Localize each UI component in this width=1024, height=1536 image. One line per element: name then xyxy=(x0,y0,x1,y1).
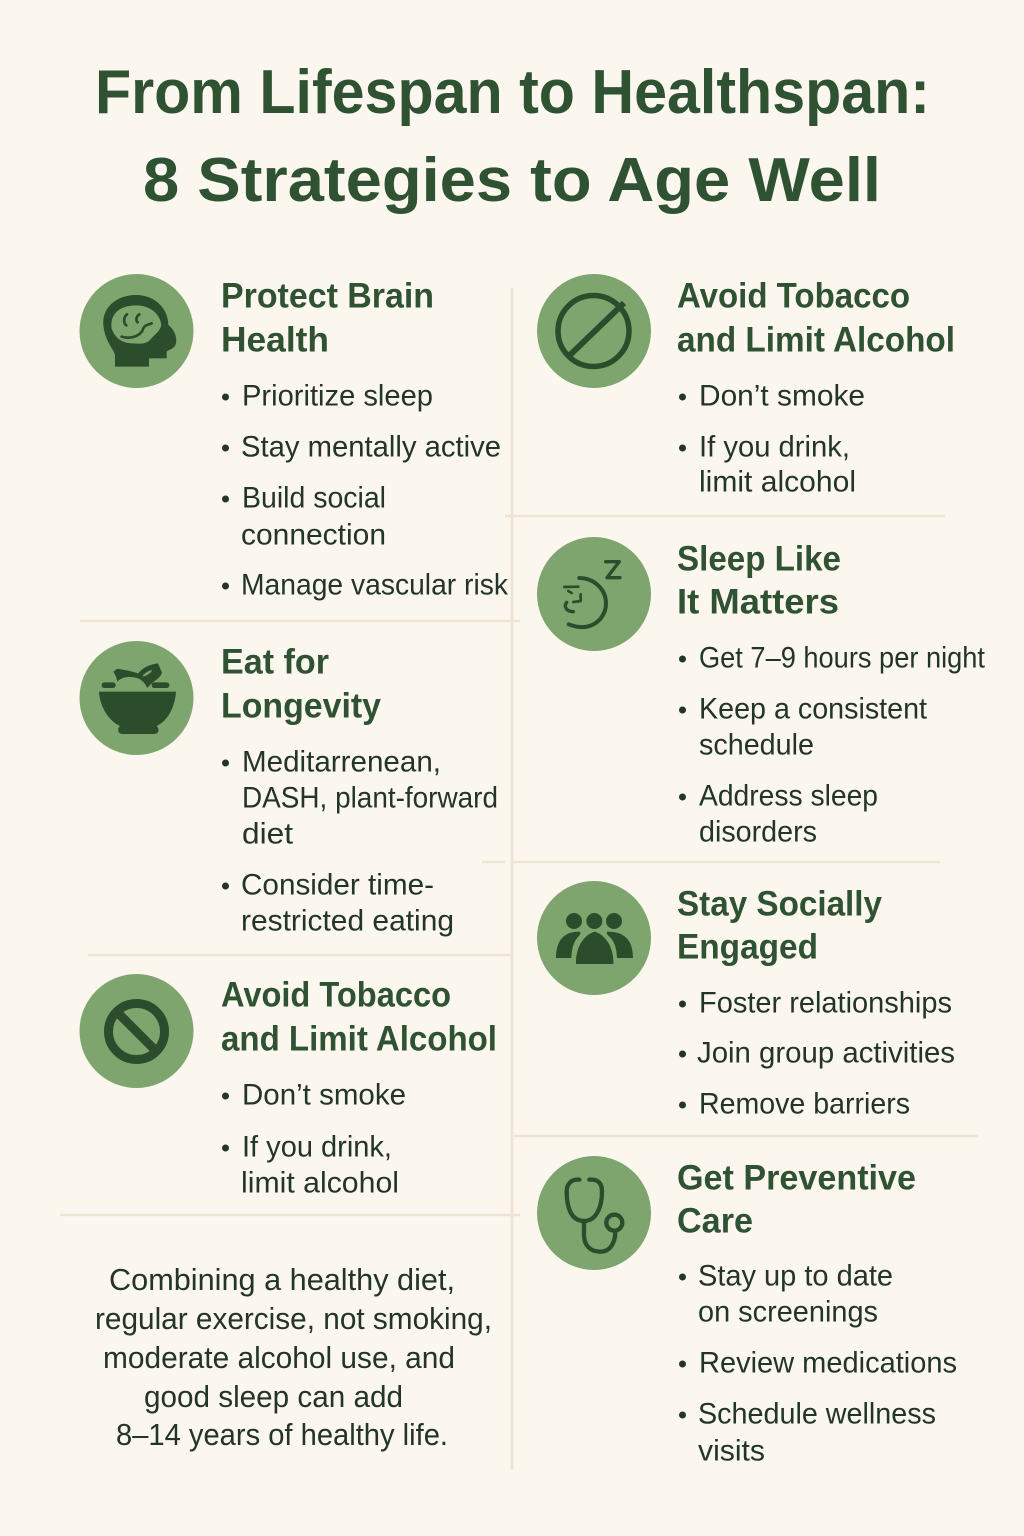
heading xyxy=(677,539,841,621)
panel: social xyxy=(537,881,955,1120)
heading xyxy=(677,1158,916,1240)
bullet list: restricted eating xyxy=(241,904,454,937)
heading: Eat for xyxy=(221,642,329,681)
panel: avoid tobacco right xyxy=(537,274,955,498)
heading: Health xyxy=(221,320,329,359)
heading: Avoid Tobacco xyxy=(677,276,910,315)
heading: Engaged xyxy=(677,927,818,966)
bullet list xyxy=(679,986,955,1120)
panel: preventive care xyxy=(537,1156,957,1467)
heading: Longevity xyxy=(221,686,382,725)
bullet list: Join group activities xyxy=(697,1036,955,1069)
bullet list: diet xyxy=(242,817,294,850)
summary text: good sleep can add xyxy=(144,1379,403,1414)
summary text: regular exercise, not smoking, xyxy=(95,1301,492,1336)
icon: sleeping face xyxy=(537,537,651,651)
bullet list: Review medications xyxy=(699,1346,957,1379)
heading: Protect Brain xyxy=(221,276,434,315)
bullet list: Remove barriers xyxy=(699,1087,910,1120)
panel: avoid tobacco left xyxy=(80,974,497,1199)
icon: head with brain xyxy=(80,274,194,388)
bullet list: Manage vascular risk xyxy=(241,568,509,601)
icon: stethoscope xyxy=(537,1156,651,1270)
bullet list: Don’t smoke xyxy=(242,1078,406,1111)
bullet list xyxy=(222,1078,406,1199)
summary text: moderate alcohol use, and xyxy=(103,1340,455,1375)
heading: It Matters xyxy=(677,582,839,621)
title: 8 Strategies to Age Well xyxy=(143,146,881,215)
summary text xyxy=(95,1262,492,1452)
bullet list: visits xyxy=(698,1434,765,1467)
bullet list: Prioritize sleep xyxy=(242,379,433,412)
bullet list xyxy=(679,1259,957,1467)
heading: Care xyxy=(677,1201,753,1240)
bullet list: Build social xyxy=(242,481,386,514)
bullet list: limit alcohol xyxy=(241,1166,399,1199)
panel: eat for longevity xyxy=(80,641,498,937)
bullet list xyxy=(679,641,986,848)
bullet list: schedule xyxy=(699,728,814,761)
bullet list: Don’t smoke xyxy=(699,379,865,412)
summary text: Combining a healthy diet, xyxy=(109,1262,455,1297)
bullet list: Stay up to date xyxy=(698,1259,893,1292)
bullet list: Consider time- xyxy=(241,868,434,901)
bullet list: connection xyxy=(241,518,386,551)
bullet list xyxy=(222,745,498,937)
heading xyxy=(221,975,497,1058)
bullet list xyxy=(679,379,865,498)
icon: salad bowl xyxy=(80,641,194,755)
bullet list xyxy=(222,379,509,601)
heading: Avoid Tobacco xyxy=(221,975,451,1014)
icon: prohibition sign xyxy=(80,974,194,1088)
bullet list: Schedule wellness xyxy=(698,1397,936,1430)
icon: thin prohibition sign xyxy=(537,274,651,388)
heading: and Limit Alcohol xyxy=(677,320,955,359)
heading: Stay Socially xyxy=(677,884,883,923)
bullet list: If you drink, xyxy=(242,1130,392,1163)
bullet list: on screenings xyxy=(698,1295,878,1328)
heading: Sleep Like xyxy=(677,539,841,578)
panel: sleep xyxy=(537,537,986,848)
heading xyxy=(677,884,883,966)
bullet list: Foster relationships xyxy=(699,986,952,1019)
heading xyxy=(221,642,382,725)
title: From Lifespan to Healthspan: xyxy=(95,58,930,127)
bullet list: If you drink, xyxy=(699,430,850,463)
bullet list: Address sleep xyxy=(699,779,878,812)
title xyxy=(95,58,930,215)
bullet list: DASH, plant-forward xyxy=(242,781,498,814)
summary text: 8–14 years of healthy life. xyxy=(116,1417,448,1452)
bullet list: Keep a consistent xyxy=(699,692,928,725)
bullet list: disorders xyxy=(699,815,817,848)
bullet list: Get 7–9 hours per night xyxy=(699,641,986,674)
icon: group of people xyxy=(537,881,651,995)
bullet list: limit alcohol xyxy=(699,465,856,498)
heading xyxy=(677,276,955,359)
heading xyxy=(221,276,434,359)
panel: protect brain health xyxy=(80,274,509,601)
bullet list: Meditarrenean, xyxy=(242,745,441,778)
heading: Get Preventive xyxy=(677,1158,916,1197)
heading: and Limit Alcohol xyxy=(221,1019,497,1058)
bullet list: Stay mentally active xyxy=(241,430,501,463)
